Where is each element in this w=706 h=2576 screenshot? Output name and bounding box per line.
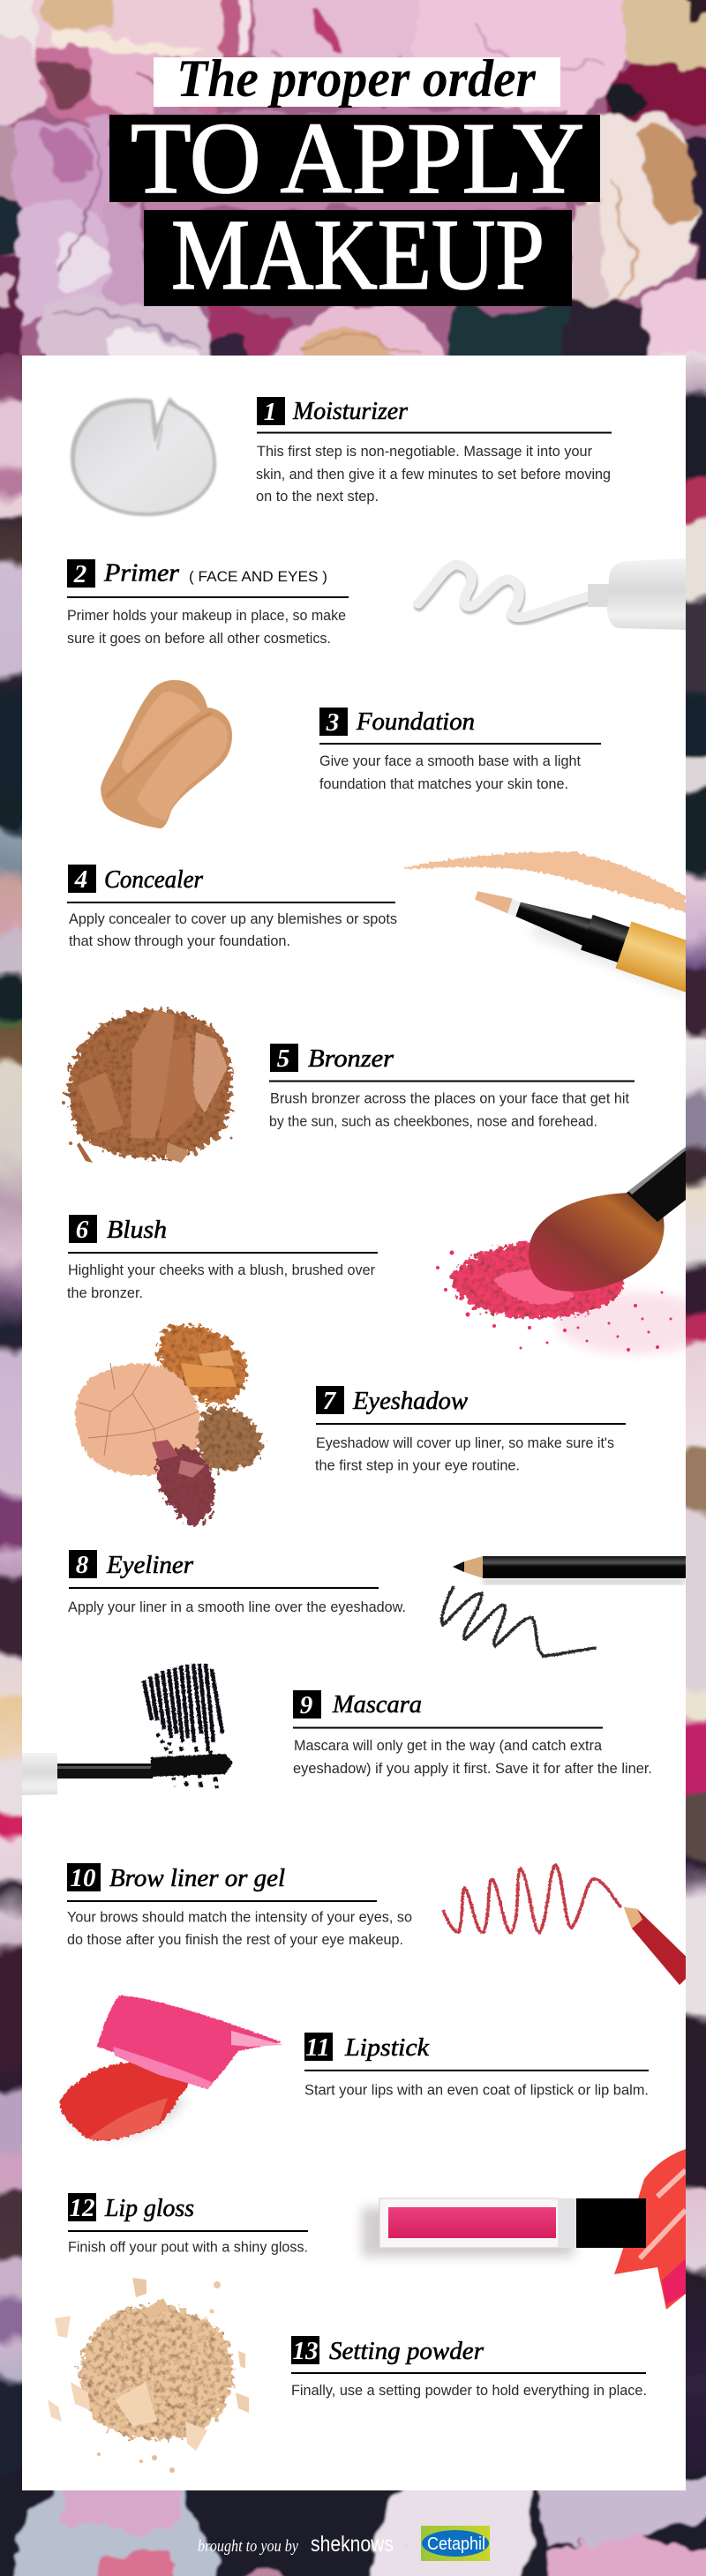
icon: lipstick swatches <box>60 1996 283 2141</box>
heading: Eyeshadow: Eyeshadow <box>352 1387 469 1415</box>
heading: Bronzer: Bronzer <box>308 1045 394 1073</box>
badge 8 <box>69 1550 97 1579</box>
icon: brow pencil and scribble <box>443 1865 697 1985</box>
badge 2 <box>67 559 95 588</box>
title line 2: TO APPLY <box>131 102 584 215</box>
description: by the sun, such as cheekbones, nose and forehead. <box>269 1113 597 1129</box>
badge 12: 12 <box>69 2194 95 2222</box>
badge 4 <box>68 865 96 894</box>
floral background: right strip <box>662 356 706 2490</box>
badge 6 <box>69 1215 97 1244</box>
rule <box>293 1727 603 1729</box>
step 10: brow liner or gel <box>67 1863 697 1985</box>
description <box>315 1435 614 1473</box>
badge 3: 3 <box>326 708 339 737</box>
floral background: bottom <box>0 2470 706 2576</box>
description <box>67 608 346 647</box>
badge 1: 1 <box>264 398 276 426</box>
step 4: concealer <box>67 852 706 997</box>
heading: Eyeliner: Eyeliner <box>106 1551 194 1579</box>
step 9: mascara <box>22 1664 652 1795</box>
badge 9: 9 <box>300 1691 312 1719</box>
description: Highlight your cheeks with a blush, brushed over <box>68 1262 375 1278</box>
icon: eyeshadow crumbles <box>75 1325 263 1526</box>
rule <box>67 1900 377 1902</box>
rule <box>269 1080 635 1082</box>
heading: Primer <box>103 559 327 588</box>
description: Eyeshadow will cover up liner, so make sure it's <box>316 1435 614 1451</box>
title <box>109 49 600 311</box>
icon: foundation swatch <box>101 680 232 828</box>
heading: Brow liner or gel: Brow liner or gel <box>109 1864 285 1892</box>
title line 1: The proper order <box>176 49 537 108</box>
rule <box>68 2230 308 2232</box>
step 1: moisturizer <box>71 397 612 516</box>
rule <box>257 432 612 434</box>
badge 6: 6 <box>76 1216 89 1244</box>
icon: moisturizer swatch <box>71 397 216 516</box>
rule <box>69 1587 379 1589</box>
description <box>256 444 611 505</box>
badge 2: 2 <box>73 560 86 588</box>
badge 7 <box>316 1386 344 1415</box>
floral background: top <box>0 0 706 415</box>
plus sign: + <box>402 2536 412 2556</box>
footer credits <box>198 2526 490 2561</box>
badge 11: 11 <box>305 2033 330 2062</box>
badge 3 <box>319 708 348 737</box>
description: eyeshadow) if you apply it first. Save it for after the liner. <box>293 1761 652 1777</box>
step 6: blush <box>67 1147 706 1354</box>
description <box>67 1909 412 1948</box>
description: the bronzer. <box>67 1285 143 1301</box>
rule <box>68 1252 378 1254</box>
description <box>67 1262 375 1301</box>
description <box>293 1738 652 1777</box>
rule <box>316 1423 626 1425</box>
rule <box>67 902 395 903</box>
icon: blush brush and powder <box>436 1147 706 1354</box>
rule <box>319 743 601 745</box>
badge 4: 4 <box>74 865 87 894</box>
rule <box>291 2372 646 2374</box>
description: that show through your foundation. <box>69 933 290 949</box>
heading: Moisturizer: Moisturizer <box>292 397 409 425</box>
description: Mascara will only get in the way (and catch extra <box>294 1738 603 1754</box>
badge 13: 13 <box>293 2337 318 2365</box>
Cetaphil logo <box>421 2526 490 2561</box>
badge 1 <box>257 397 285 426</box>
icon: eyeliner pencil and scribble <box>442 1556 686 1656</box>
step 13: setting powder <box>48 2278 647 2473</box>
step 11: lipstick <box>60 1996 649 2141</box>
description: Your brows should match the intensity of your eyes, so <box>67 1909 412 1925</box>
description: sure it goes on before all other cosmetics. <box>67 631 331 647</box>
description <box>319 753 581 792</box>
description <box>269 1090 629 1129</box>
rule <box>67 596 349 598</box>
step 3: foundation <box>101 680 601 828</box>
panel: white card <box>22 356 686 2490</box>
heading: Blush: Blush <box>107 1216 167 1244</box>
icon: setting powder <box>48 2278 249 2473</box>
icon: lip gloss tube and smear <box>362 2149 686 2310</box>
description <box>69 911 397 949</box>
description: Give your face a smooth base with a light <box>319 753 581 769</box>
heading: Lipstick: Lipstick <box>344 2033 430 2062</box>
heading: Mascara: Mascara <box>332 1690 422 1719</box>
heading: Setting powder: Setting powder <box>329 2337 484 2365</box>
badge 10: 10 <box>71 1864 95 1892</box>
description: Start your lips with an even coat of lipstick or lip balm. <box>304 2082 649 2098</box>
sheknows logo: sheknows <box>311 2532 394 2557</box>
description: Primer holds your makeup in place, so make <box>67 608 346 624</box>
description: Finally, use a setting powder to hold everything in place. <box>291 2383 647 2399</box>
icon: bronzer powder <box>62 1009 233 1163</box>
description: skin, and then give it a few minutes to set before moving <box>256 467 611 483</box>
step 5: bronzer <box>62 1009 635 1163</box>
description: Finish off your pout with a shiny gloss. <box>68 2240 308 2256</box>
badge 9 <box>293 1690 321 1719</box>
brought to you by: brought to you by <box>198 2537 298 2556</box>
heading: Foundation: Foundation <box>356 708 475 736</box>
Cetaphil logo: Cetaphil <box>427 2535 485 2554</box>
badge 5 <box>270 1044 298 1073</box>
icon: primer tube and squiggle <box>418 558 686 630</box>
heading: Concealer: Concealer <box>104 865 204 894</box>
description: Brush bronzer across the places on your face that get hit <box>270 1090 629 1106</box>
title line 3: MAKEUP <box>171 198 545 311</box>
icon: concealer pen and stroke <box>404 852 706 997</box>
badge 8: 8 <box>76 1551 89 1579</box>
description: do those after you finish the rest of your eye makeup. <box>67 1932 403 1948</box>
description: the first step in your eye routine. <box>315 1457 520 1473</box>
badge 5: 5 <box>277 1045 289 1073</box>
description: on to the next step. <box>256 489 379 505</box>
icon: mascara wand and smear <box>22 1664 233 1795</box>
description: Apply concealer to cover up any blemishes or spots <box>69 911 397 927</box>
badge 7: 7 <box>323 1387 337 1415</box>
step 7: eyeshadow <box>75 1325 626 1526</box>
step 12: lip gloss <box>68 2149 686 2310</box>
description: This first step is non-negotiable. Massage it into your <box>257 444 592 460</box>
step 8: eyeliner <box>68 1550 686 1656</box>
floral background: left strip <box>0 356 44 2490</box>
heading: Primer: ( FACE AND EYES ) <box>189 569 327 585</box>
heading: Lip gloss: Lip gloss <box>104 2194 194 2222</box>
description: Apply your liner in a smooth line over the eyeshadow. <box>68 1599 406 1615</box>
description: foundation that matches your skin tone. <box>319 776 568 792</box>
rule <box>304 2070 649 2071</box>
step 2: primer <box>67 558 686 647</box>
heading: Primer: Primer <box>103 559 180 588</box>
